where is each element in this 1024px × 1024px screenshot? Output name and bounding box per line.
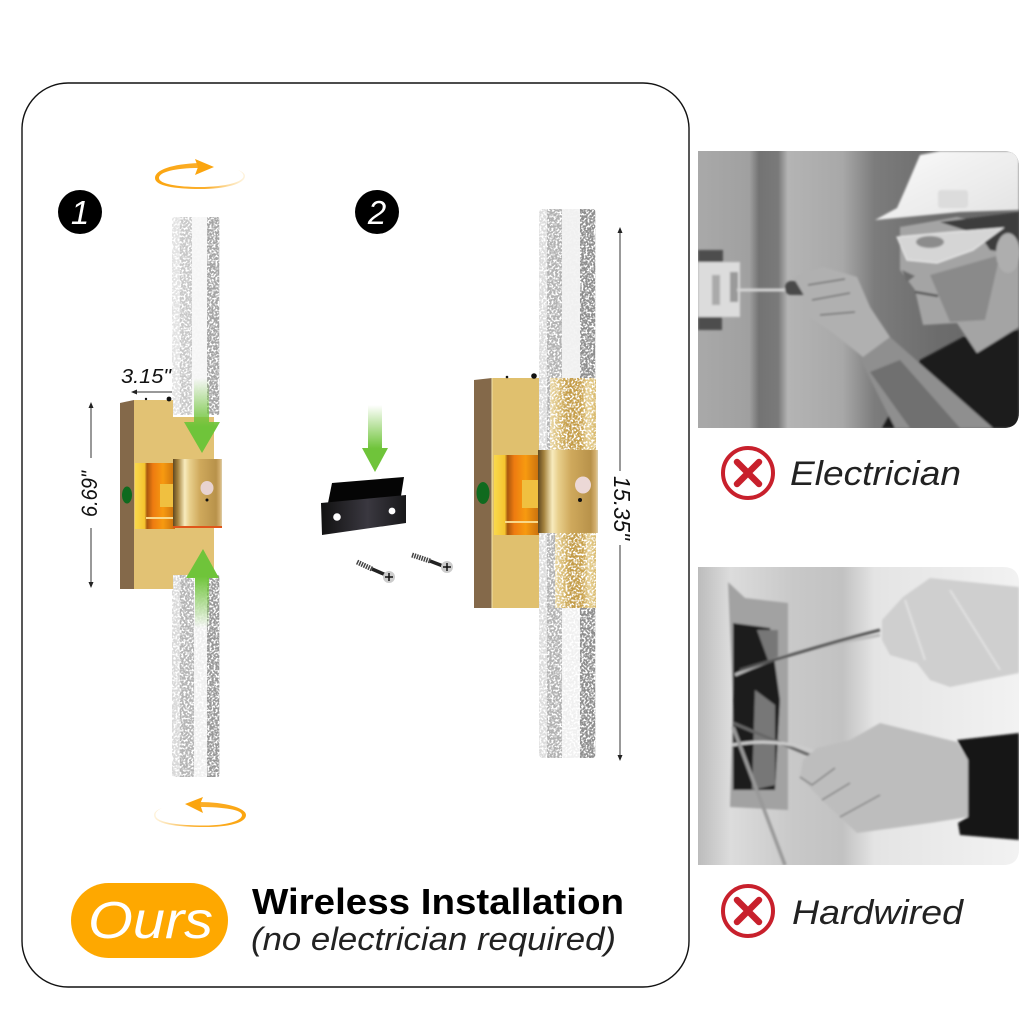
green arrow up xyxy=(186,549,219,628)
icon: red x, hardwired xyxy=(723,886,773,936)
photo: electrician at work xyxy=(698,151,1020,428)
screw xyxy=(412,555,453,573)
upper glass tube xyxy=(172,217,220,415)
dimension: 6.69 inch: 6.69" xyxy=(77,470,102,517)
orange reflective body xyxy=(135,463,175,529)
green arrow down xyxy=(184,378,220,453)
wall plate xyxy=(474,373,540,608)
lamp exploded view, step 1 xyxy=(120,217,222,777)
step badge 2: 2 xyxy=(367,194,386,231)
dimension: 3.15 inch xyxy=(121,366,172,394)
step badge 1: 1 xyxy=(71,194,89,231)
screw xyxy=(357,562,395,583)
green arrow down xyxy=(362,405,388,472)
icon: top rotation arrow xyxy=(155,159,245,189)
mounting bracket with arrow and screws xyxy=(321,405,453,583)
label: hardwired: Hardwired xyxy=(792,894,964,932)
gold sensor band xyxy=(538,450,598,533)
wall plate xyxy=(120,397,214,589)
heading: wireless installation: Wireless Installation xyxy=(252,881,624,922)
badge: ours xyxy=(71,883,228,958)
assembled lamp, step 2 xyxy=(474,209,598,758)
step badge 2 xyxy=(355,190,399,234)
orange reflective body xyxy=(494,455,539,535)
bracket xyxy=(321,477,406,535)
label: electrician: Electrician xyxy=(790,455,961,493)
dimension: 3.15 inch: 3.15" xyxy=(121,366,172,388)
step badge 1 xyxy=(58,190,102,234)
glass tube xyxy=(539,209,596,758)
badge: ours: Ours xyxy=(88,892,213,950)
icon: bottom rotation arrow xyxy=(154,797,246,827)
panel: ours wireless installation xyxy=(22,83,689,987)
photo: hardwired wall box xyxy=(698,567,1019,865)
lower glass tube xyxy=(172,575,220,777)
icon: red x, electrician xyxy=(723,448,773,498)
gold sensor band xyxy=(173,459,222,528)
subheading: no electrician required: (no electrician required) xyxy=(251,921,616,957)
dimension: 15.35 inch xyxy=(609,227,635,761)
dimension: 6.69 inch xyxy=(77,402,102,588)
dimension: 15.35 inch: 15.35" xyxy=(609,476,635,542)
